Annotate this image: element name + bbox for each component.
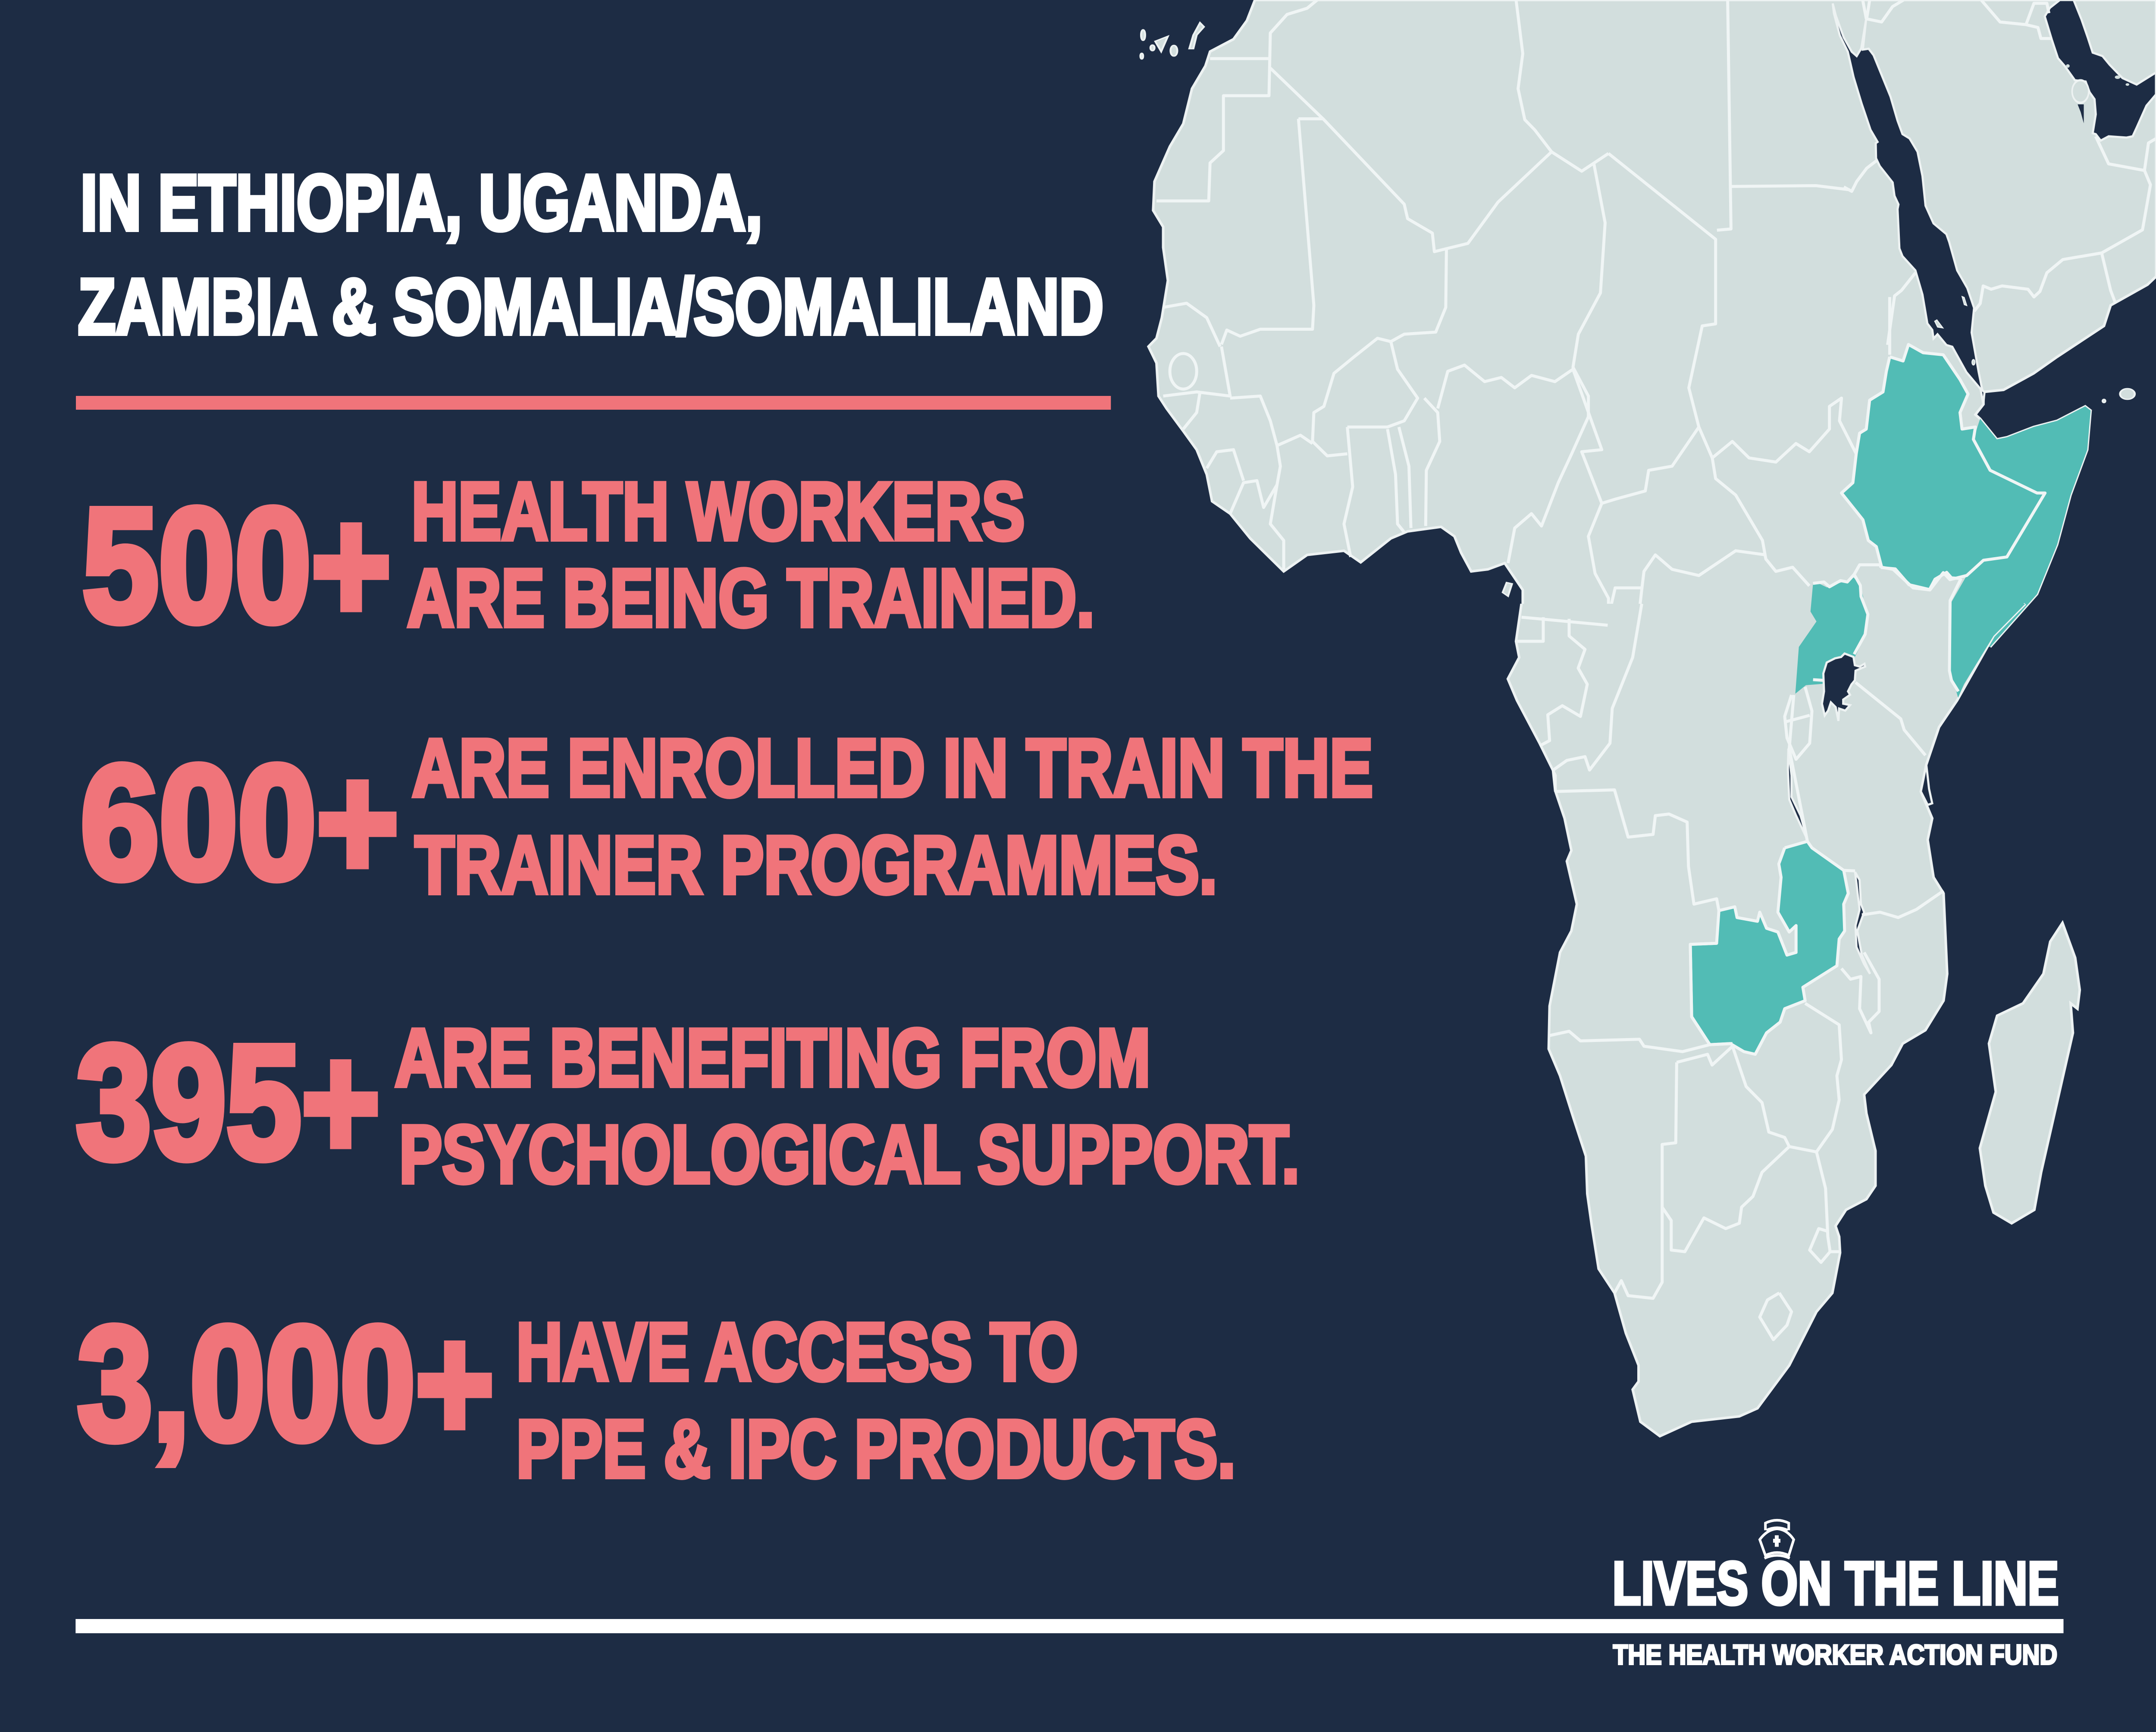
Lake Victoria	[1822, 653, 1865, 721]
Lake Tanganyika	[1788, 749, 1808, 840]
land: north	[1148, 0, 2156, 647]
Red Sea islands	[1935, 297, 1975, 365]
logo: Lives on the Line	[1612, 1520, 2059, 1670]
Lake Malawi	[1855, 872, 1870, 974]
land: south	[1508, 604, 2025, 1436]
highlighted country: Somalia and Somaliland	[1951, 406, 2090, 647]
islands north	[1141, 23, 2135, 596]
southern Africa and Madagascar	[1508, 604, 2080, 1436]
country borders south	[1517, 604, 1943, 1340]
heading: IN ETHIOPIA, UGANDA,	[81, 158, 762, 247]
Arabian borders	[1844, 0, 2156, 345]
Red Sea	[1833, 3, 1984, 404]
Persian Gulf	[2045, 0, 2156, 141]
coastal channels and islands	[1921, 765, 1932, 805]
heading rule	[76, 396, 1111, 410]
highlighted country: Ethiopia	[1842, 345, 2045, 590]
stat: 3,000+	[78, 1293, 1236, 1494]
stat: 3,000+: 3,000+	[78, 1293, 494, 1474]
stat: 500+: 500+	[82, 475, 391, 656]
heading: ZAMBIA & SOMALIA/SOMALILAND	[78, 262, 1103, 351]
heading	[78, 158, 1103, 351]
stat: 600+: 600+	[81, 732, 399, 913]
East African borders and Lake Victoria	[1813, 565, 1961, 755]
icon: nurse cap	[1760, 1520, 1794, 1558]
stat: 395+: PSYCHOLOGICAL SUPPORT.	[399, 1108, 1300, 1200]
highlighted country: Zambia	[1690, 841, 1848, 1054]
country borders north	[1156, 0, 2045, 647]
map of Africa	[1141, 0, 2156, 1436]
stat: 600+	[81, 722, 1373, 913]
stat: 500+: ARE BEING TRAINED.	[407, 552, 1094, 643]
Kenya borders	[1813, 565, 1961, 755]
logo wordmark: LIVES ON THE LINE	[1612, 1549, 2059, 1618]
Madagascar	[1980, 923, 2080, 1223]
stat: 3,000+: PPE & IPC PRODUCTS.	[516, 1403, 1236, 1494]
stat: 500+	[82, 465, 1094, 656]
footer rule	[75, 1619, 2063, 1633]
stat: 395+: 395+	[76, 1012, 380, 1193]
northern Africa and Arabia	[1141, 0, 2156, 647]
logo strapline: THE HEALTH WORKER ACTION FUND	[1613, 1639, 2057, 1670]
stat: 395+	[76, 1012, 1300, 1200]
stat: 395+: ARE BENEFITING FROM	[395, 1012, 1150, 1103]
stat: 3,000+: HAVE ACCESS TO	[516, 1306, 1078, 1397]
Gulf bay and islands	[2066, 64, 2129, 123]
stat: 600+: ARE ENROLLED IN TRAIN THE	[412, 722, 1373, 813]
stat: 500+: HEALTH WORKERS	[411, 465, 1025, 557]
Uganda	[1796, 577, 1868, 693]
stat: 600+: TRAINER PROGRAMMES.	[415, 819, 1217, 910]
highlighted country: Somalia south	[1950, 604, 2025, 698]
